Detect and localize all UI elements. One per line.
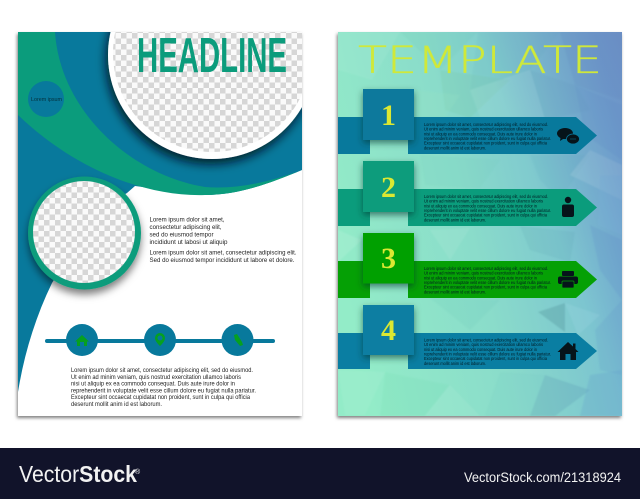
icon: phone bbox=[234, 334, 243, 346]
green curved band bbox=[18, 32, 302, 195]
text block: intro paragraph: Lorem ipsum dolor sit amet, bbox=[150, 216, 225, 224]
small circle label: Lorem ipsum bbox=[28, 81, 64, 117]
text block 3: Excepteur sint occaecat cupidatat non proident, sunt in culpa qui officia bbox=[424, 285, 547, 290]
step 4 bbox=[338, 305, 597, 369]
step 1 bbox=[338, 89, 597, 154]
text block 1: nisi ut aliquip ex ea commodo consequat. Duis aute irure dolor in bbox=[424, 131, 537, 136]
icon: person bbox=[562, 197, 574, 217]
numeral 3: 3 bbox=[381, 242, 396, 275]
icon: home bbox=[75, 335, 89, 346]
blue curved background bbox=[18, 32, 302, 392]
ribbon 1 bbox=[338, 117, 597, 154]
heading: TEMPLATE: TEMPLATE bbox=[358, 39, 602, 82]
text block: intro paragraph: consectetur adipiscing elit, bbox=[150, 224, 222, 231]
ribbon 4 bbox=[338, 333, 597, 369]
icon: chat bubbles bbox=[557, 128, 580, 144]
icon: printer bbox=[558, 271, 578, 288]
small circle label: Lorem ipsum: Lorem ipsum bbox=[31, 97, 62, 103]
number box 3 bbox=[363, 233, 414, 284]
text block 3: Lorem ipsum dolor sit amet, consectetur adipiscing elit, sed do eiusmod. bbox=[424, 266, 548, 271]
text block: intro paragraph bbox=[150, 216, 297, 264]
text block 1: Excepteur sint occaecat cupidatat non proident, sunt in culpa qui officia bbox=[424, 141, 547, 146]
text block 3: nisi ut aliquip ex ea commodo consequat. Duis aute irure dolor in bbox=[424, 275, 537, 280]
step 2 bbox=[338, 161, 597, 226]
text block: bottom paragraph: nisi ut aliquip ex ea commodo consequat. Duis aute irure dolor in bbox=[71, 382, 235, 388]
text block 1: deserunt mollit anim id est laborum. bbox=[424, 145, 486, 150]
text block: bottom paragraph bbox=[71, 368, 256, 408]
text block 1: Lorem ipsum dolor sit amet, consectetur adipiscing elit, sed do eiusmod. bbox=[424, 122, 548, 127]
text block: intro paragraph: incididunt ut labosi ut aliquip bbox=[150, 239, 228, 246]
text block 4: Lorem ipsum dolor sit amet, consectetur adipiscing elit, sed do eiusmod. bbox=[424, 338, 548, 342]
footer logo: VectorStock: VectorStock bbox=[19, 461, 138, 487]
text block 2: Ut enim ad minim veniam, quis nostrud exercitation ullamco laboris bbox=[424, 199, 544, 204]
text block 2: deserunt mollit anim id est laborum. bbox=[424, 217, 486, 222]
text block: bottom paragraph: Ut enim ad minim veniam, quis nostrud exercitation ullamco laboris bbox=[71, 375, 241, 381]
text block 4: deserunt mollit anim id est laborum. bbox=[424, 361, 486, 366]
text block 4 bbox=[424, 338, 551, 366]
low-poly background facets bbox=[338, 72, 622, 416]
text block: bottom paragraph: deserunt mollit anim id est laborum. bbox=[71, 402, 162, 408]
numeral 4: 4 bbox=[381, 314, 396, 347]
text block 3: Ut enim ad minim veniam, quis nostrud exercitation ullamco laboris bbox=[424, 271, 544, 276]
text block 2: Lorem ipsum dolor sit amet, consectetur adipiscing elit, sed do eiusmod. bbox=[424, 194, 548, 199]
text block 3 bbox=[424, 266, 551, 294]
numeral 2: 2 bbox=[381, 171, 396, 204]
text block 2 bbox=[424, 194, 551, 222]
text block 3: deserunt mollit anim id est laborum. bbox=[424, 289, 486, 294]
timeline with three icon circles bbox=[45, 324, 275, 356]
text block 4: reprehenderit in voluptate velit esse cillum dolore eu fugiat nulla pariatur. bbox=[424, 352, 551, 356]
text block 4: Ut enim ad minim veniam, quis nostrud exercitation ullamco laboris bbox=[424, 342, 544, 347]
text block 4: nisi ut aliquip ex ea commodo consequat. Duis aute irure dolor in bbox=[424, 347, 537, 352]
icon: location pin bbox=[155, 333, 165, 346]
footer registered mark: ® bbox=[135, 468, 141, 476]
text block 1: reprehenderit in voluptate velit esse cillum dolore eu fugiat nulla pariatur. bbox=[424, 136, 551, 141]
text block: bottom paragraph: Excepteur sint occaecat cupidatat non proident, sunt in culpa qui officia bbox=[71, 395, 251, 401]
number box 1 bbox=[363, 89, 414, 140]
footer bar bbox=[0, 448, 640, 499]
number box 2 bbox=[363, 161, 414, 212]
ribbon 2 bbox=[338, 189, 597, 226]
text block: bottom paragraph: Lorem ipsum dolor sit amet, consectetur adipiscing elit, sed do eiusmod. bbox=[71, 368, 253, 374]
top photo placeholder circle bbox=[98, 32, 302, 172]
heading: HEADLINE: HEADLINE bbox=[137, 28, 287, 83]
text block: intro paragraph: Lorem ipsum dolor sit amet, consectetur adipiscing elit. bbox=[150, 250, 297, 256]
side photo placeholder circle bbox=[28, 176, 141, 290]
text block 2: Excepteur sint occaecat cupidatat non proident, sunt in culpa qui officia bbox=[424, 213, 547, 218]
panel: right flyer page bbox=[338, 32, 622, 416]
text block 1: Ut enim ad minim veniam, quis nostrud exercitation ullamco laboris bbox=[424, 127, 544, 132]
footer url: VectorStock.com/21318924 bbox=[464, 470, 621, 485]
text block 2: reprehenderit in voluptate velit esse cillum dolore eu fugiat nulla pariatur. bbox=[424, 208, 551, 213]
text block: intro paragraph: Sed do eiusmod tempor incididunt ut labore et dolore. bbox=[150, 257, 295, 264]
number box 4 bbox=[363, 305, 414, 355]
text block 1 bbox=[424, 122, 551, 150]
ribbon 3 bbox=[338, 261, 597, 298]
panel: left flyer page bbox=[18, 0, 316, 416]
icon: house bbox=[558, 342, 578, 360]
step 3 bbox=[338, 233, 597, 298]
text block: intro paragraph: sed do eiusmod tempor bbox=[150, 232, 214, 238]
text block 3: reprehenderit in voluptate velit esse cillum dolore eu fugiat nulla pariatur. bbox=[424, 280, 551, 285]
text block: bottom paragraph: reprehenderit in voluptate velit esse cillum dolore eu fugiat nulla pariatur. bbox=[71, 388, 256, 394]
text block 2: nisi ut aliquip ex ea commodo consequat. Duis aute irure dolor in bbox=[424, 203, 537, 208]
text block 4: Excepteur sint occaecat cupidatat non proident, sunt in culpa qui officia bbox=[424, 356, 547, 361]
numeral 1: 1 bbox=[381, 99, 396, 132]
